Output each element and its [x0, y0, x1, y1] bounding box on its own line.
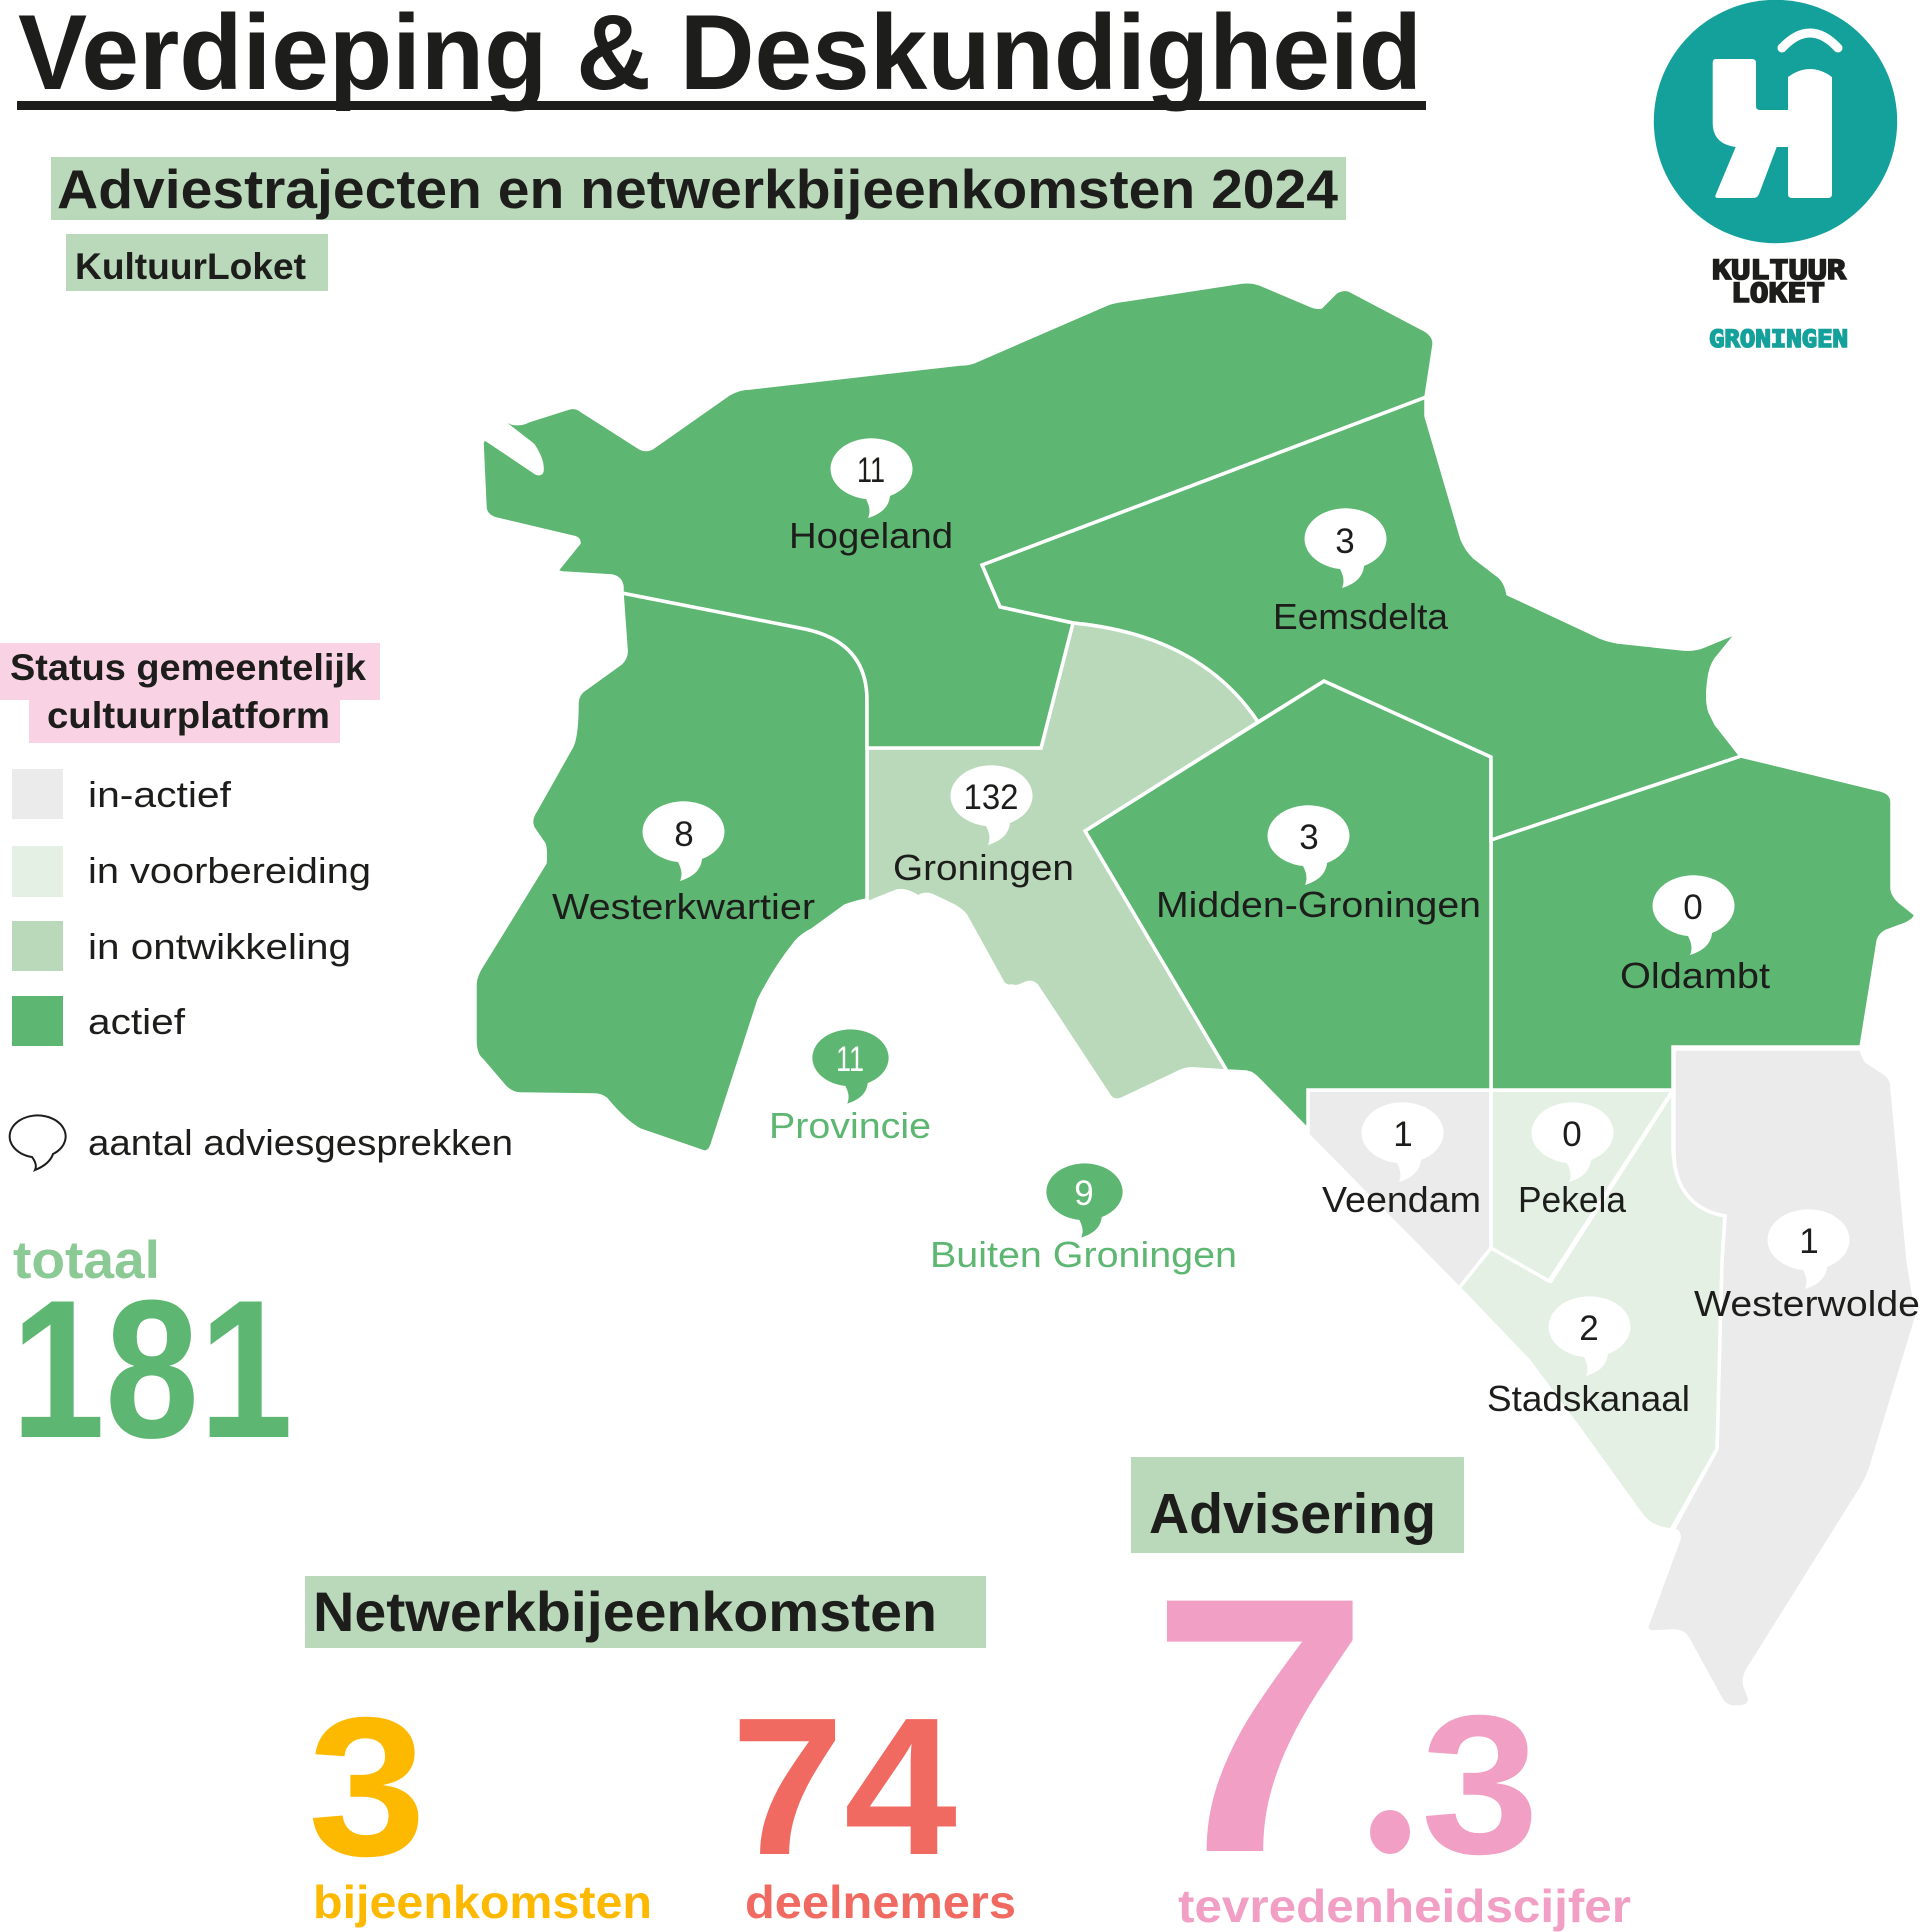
logo: KultuurLoket Groningen: LOKET [1731, 278, 1825, 309]
stat: totaal 181: 181 [11, 1259, 293, 1479]
bubble: Oldambt count [1653, 875, 1735, 955]
stat: 74 deelnemers [731, 1677, 1016, 1928]
legend: aantal adviesgesprekken [10, 1115, 513, 1170]
region: Stadskanaal [1459, 1091, 1725, 1530]
region: Oldambt [1491, 756, 1915, 1090]
label: Westerkwartier: Westerkwartier [552, 886, 815, 927]
legend: in voorbereiding [12, 846, 371, 897]
stat: 3 bijeenkomsten: 3 [308, 1676, 426, 1897]
bubble: Hogeland count: 11 [857, 451, 885, 490]
region: Veendam [1308, 1090, 1491, 1288]
region: Pekela [1491, 1090, 1673, 1281]
legend: in ontwikkeling [12, 921, 351, 971]
heading: KultuurLoket: KultuurLoket [75, 246, 306, 287]
label: Eemsdelta: Eemsdelta [1273, 596, 1449, 637]
bubble: Pekela count: 0 [1562, 1115, 1582, 1154]
bubble: Buiten Groningen count: 9 [1074, 1174, 1094, 1213]
region: Westerkwartier [475, 593, 867, 1152]
bubble: Buiten Groningen count [1046, 1163, 1123, 1238]
region: Hogeland [482, 282, 1434, 748]
legend: heading: Status gemeentelijk [10, 647, 366, 688]
bubble: Provincie count [812, 1029, 889, 1104]
label: Veendam: Veendam [1322, 1179, 1481, 1220]
label: Oldambt: Oldambt [1620, 955, 1770, 996]
region: Eemsdelta [982, 397, 1741, 840]
heading: KultuurLoket [66, 234, 328, 291]
label: Groningen: Groningen [893, 847, 1074, 888]
bubble: Hogeland count [831, 438, 913, 518]
label: Hogeland: Hogeland [789, 515, 953, 556]
bubble: Westerkwartier count [643, 801, 725, 881]
legend: actief: actief [88, 1001, 186, 1042]
legend: aantal adviesgesprekken: aantal adviesgesprekken [88, 1122, 513, 1163]
legend: heading: cultuurplatform [47, 695, 330, 736]
stat: totaal label: totaal [13, 1231, 160, 1290]
bubble: Eemsdelta count [1305, 508, 1387, 588]
bubble: Oldambt count: 0 [1683, 888, 1703, 927]
label: Pekela: Pekela [1518, 1179, 1627, 1220]
bubble: Groningen count [951, 765, 1033, 845]
legend: in voorbereiding: in voorbereiding [88, 850, 371, 891]
region: Groningen [867, 623, 1258, 1100]
heading: Netwerkbijeenkomsten: Netwerkbijeenkomsten [313, 1580, 937, 1643]
bubble: Eemsdelta count: 3 [1335, 522, 1355, 561]
stat: 7.3 tevredenheidscijfer [1150, 1522, 1631, 1932]
bubble: Stadskanaal count: 2 [1579, 1309, 1599, 1348]
region: Westerwolde [1647, 1049, 1917, 1707]
stat: 7.3 tevredenheidscijfer: 7 [1150, 1522, 1370, 1929]
bubble: Provincie count: 11 [836, 1040, 864, 1079]
bubble: Stadskanaal count [1549, 1296, 1631, 1376]
label: Stadskanaal: Stadskanaal [1487, 1378, 1690, 1419]
label: Midden-Groningen: Midden-Groningen [1156, 884, 1481, 925]
legend: in-actief: in-actief [88, 774, 232, 815]
label: Buiten Groningen: Buiten Groningen [930, 1234, 1237, 1275]
legend: actief [12, 996, 186, 1046]
bubble: Veendam count: 1 [1393, 1115, 1413, 1154]
legend: heading [0, 643, 380, 743]
bubble: Westerwolde count [1768, 1209, 1850, 1289]
heading: Advisering: Advisering [1149, 1482, 1436, 1546]
stat: 7.3 tevredenheidscijfer: tevredenheidscijfer [1178, 1880, 1631, 1932]
bubble: Westerwolde count: 1 [1799, 1222, 1819, 1261]
stat: 7.3 tevredenheidscijfer: . [1370, 1715, 1409, 1872]
logo: KultuurLoket Groningen: GRONINGEN [1709, 325, 1848, 353]
heading: Advisering [1131, 1457, 1464, 1553]
bubble: Westerkwartier count: 8 [674, 815, 694, 854]
stat: 7.3 tevredenheidscijfer: 3 [1421, 1674, 1539, 1895]
stat: 74 deelnemers: 74 [731, 1677, 957, 1896]
bubble: Midden-Groningen count: 3 [1299, 818, 1319, 857]
stat: 3 bijeenkomsten: bijeenkomsten [313, 1876, 652, 1928]
logo: KultuurLoket Groningen [1654, 0, 1897, 353]
logo: KultuurLoket Groningen: KULTUUR [1712, 255, 1847, 286]
bubble: Midden-Groningen count [1268, 805, 1350, 885]
stat: 74 deelnemers: deelnemers [745, 1876, 1016, 1928]
bubble: Groningen count: 132 [964, 778, 1018, 817]
label: Westerwolde: Westerwolde [1694, 1283, 1920, 1324]
map: municipalities [475, 282, 1917, 1707]
bubble: Pekela count [1532, 1102, 1614, 1182]
bubble: Veendam count [1362, 1102, 1444, 1182]
stat: 3 bijeenkomsten [308, 1676, 652, 1928]
region: Midden-Groningen [1085, 681, 1491, 1130]
legend: in ontwikkeling: in ontwikkeling [88, 926, 351, 967]
heading: subtitle: Adviestrajecten en netwerkbijeenkomsten 2024 [57, 158, 1338, 220]
legend: in-actief [12, 769, 232, 819]
label: Provincie: Provincie [769, 1105, 931, 1146]
